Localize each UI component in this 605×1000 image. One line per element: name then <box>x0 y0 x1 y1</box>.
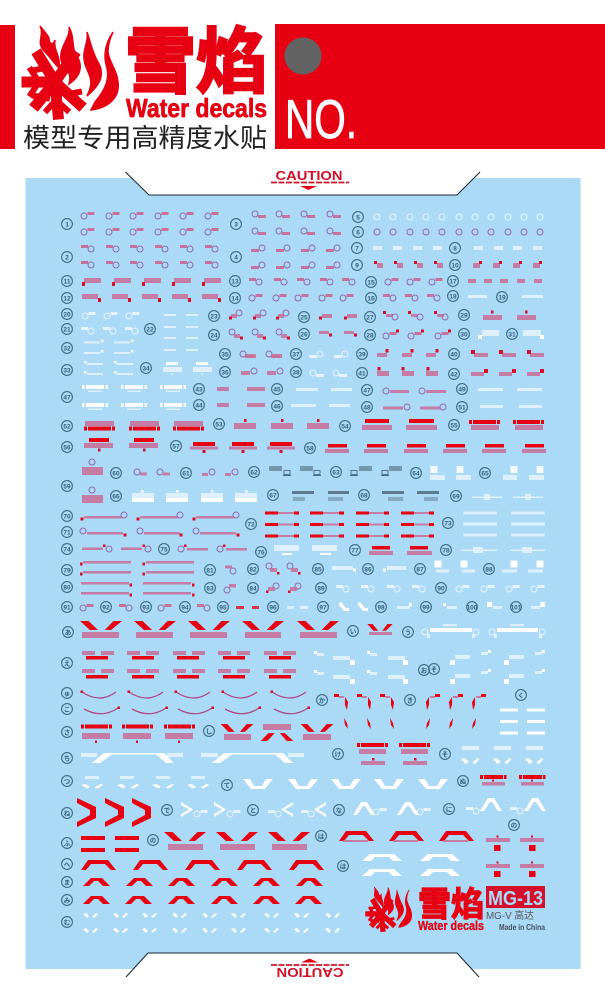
row 1-6: circles with labels: 1 <box>65 222 69 228</box>
row 2,4,7-10 <box>62 243 542 270</box>
row 20-31: 26 <box>300 332 308 338</box>
product code box: MG-13 <box>488 888 543 910</box>
row 43-51: 51 <box>458 404 466 412</box>
row ね: red chevrons and white marks: と <box>250 806 256 814</box>
row 20-31 <box>62 309 544 351</box>
row 79-90: 82 <box>249 566 257 574</box>
row え: blobs and red bars: そ <box>431 666 437 674</box>
row 91-101: 91 <box>63 604 71 612</box>
row 59-69: 65 <box>481 470 489 478</box>
row 32-42: 34 <box>142 366 150 372</box>
row 20-31: 20 <box>63 312 71 318</box>
row 59-69: 69 <box>452 494 460 500</box>
row 79-90: 80 <box>63 584 71 592</box>
row 70-78: 76 <box>257 550 265 556</box>
row 11-18: 18 <box>449 294 457 300</box>
row む: small white marks: む <box>64 918 71 926</box>
row 91-101: 95 <box>219 604 227 612</box>
row 52-55: 53 <box>215 422 223 428</box>
row 1-6: circles with labels <box>62 211 543 237</box>
row 32-42: 36 <box>221 370 229 376</box>
row 59-69: 63 <box>332 470 340 476</box>
row 79-90: 90 <box>437 586 445 592</box>
row ふ の は: red marks: は <box>318 832 325 840</box>
bottom notch with flipped caution mark <box>126 953 479 980</box>
row 32-42: 35 <box>221 352 229 358</box>
row 59-69: 62 <box>250 470 258 476</box>
row 11-18: 13 <box>231 278 239 286</box>
row 91-101: 99 <box>422 604 430 612</box>
row 20-31: 24 <box>210 332 218 340</box>
row 32-42: 42 <box>450 372 458 378</box>
row 91-101: 94 <box>181 604 189 612</box>
row 43-51: 47 <box>363 388 371 394</box>
row ふ の は: red marks: の <box>511 822 518 830</box>
row 70-78: 78 <box>442 548 450 554</box>
row 1-6: circles with labels: 3 <box>234 222 238 228</box>
row 79-90: 79 <box>63 568 71 574</box>
row 52-55: 55 <box>450 422 458 430</box>
row 11-18: 14 <box>231 296 239 302</box>
row 91-101: 96 <box>269 604 277 612</box>
row: smile curves <box>82 692 308 714</box>
row 70-78: 74 <box>63 546 71 554</box>
row 79-90 <box>62 560 544 596</box>
row 91-101: 93 <box>142 604 150 612</box>
row 59-69: 59 <box>63 484 71 490</box>
row 59-69 <box>62 459 544 503</box>
row 32-42: 32 <box>63 346 71 352</box>
row 32-42: 38 <box>292 370 300 376</box>
row 70-78: 71 <box>63 530 71 536</box>
row ち つ て ぬ: white hats <box>62 753 545 790</box>
panel: red number banner <box>275 24 605 150</box>
row 11-18: 16 <box>367 296 375 302</box>
row ね: red chevrons and white marks: で <box>164 808 171 814</box>
row さ し け そ: し <box>206 728 212 736</box>
row 43-51: 43 <box>195 386 203 394</box>
panel: red number banner: NO. <box>285 88 357 150</box>
row へ ま み: red hats: ま <box>64 878 70 886</box>
row 11-18: 12 <box>63 296 71 302</box>
row: kana badges and red spikes: こ <box>64 706 70 714</box>
kana rows: red V marks with labels: う <box>405 628 411 636</box>
row 32-42: 33 <box>63 368 71 374</box>
row 52-55: 52 <box>63 424 71 430</box>
row 59-69: 60 <box>112 470 120 478</box>
row 43-51: 49 <box>458 386 466 394</box>
row ち つ て ぬ: white hats: つ <box>64 778 71 786</box>
header: left red bar <box>0 25 15 149</box>
row 56-58: 57 <box>172 444 180 450</box>
row 20-31: 29 <box>460 312 468 320</box>
row: kana badges and red spikes: か <box>319 696 326 704</box>
row: kana badges and red spikes <box>62 688 545 734</box>
row へ ま み: red hats: み <box>64 896 71 904</box>
icon: flame snowflake logo <box>27 26 118 114</box>
row 32-42 <box>62 340 544 379</box>
row 11-18: 17 <box>449 278 457 286</box>
row 20-31: 21 <box>63 326 71 334</box>
row さ し け そ: さ <box>64 728 70 736</box>
row 20-31: 28 <box>366 332 374 340</box>
row 70-78: 72 <box>247 522 255 528</box>
row へ ま み: red hats <box>62 859 324 905</box>
row 32-42: 40 <box>450 352 458 358</box>
row ね: red chevrons and white marks: な <box>336 806 343 814</box>
row え: blobs and red bars <box>62 650 545 684</box>
panel: decal sheet background <box>26 178 580 969</box>
row 2,4,7-10: 8 <box>453 246 457 252</box>
row 59-69: 61 <box>182 470 190 478</box>
row さ し け そ: け <box>335 750 341 758</box>
row へ ま み: red hats: へ <box>64 860 71 868</box>
row: kana badges and red spikes: ゅ <box>64 690 70 698</box>
row 91-101: 97 <box>319 604 327 612</box>
row え: blobs and red bars: え <box>64 658 70 668</box>
row ふ の は: red marks <box>62 820 544 877</box>
row 2,4,7-10: 4 <box>234 254 238 262</box>
row 79-90: 83 <box>206 586 214 592</box>
row 70-78: 75 <box>160 546 168 554</box>
row ち つ て ぬ: white hats: ち <box>64 754 70 762</box>
bottom notch with flipped caution mark: CAUTION <box>276 965 344 980</box>
row 20-31: 25 <box>300 314 308 322</box>
row 70-78: 70 <box>63 514 71 520</box>
row 79-90: 89 <box>317 586 325 592</box>
row 43-51 <box>62 384 542 412</box>
row 91-101: 101 <box>511 604 522 612</box>
row 59-69: 66 <box>112 494 120 500</box>
row 2,4,7-10: 2 <box>65 254 69 262</box>
row 11-18: 11 <box>64 278 71 286</box>
row 1-6: circles with labels: 6 <box>356 230 360 236</box>
model name: MG-V 高达 <box>486 909 534 922</box>
row ち つ て ぬ: white hats: ぬ <box>460 778 467 786</box>
row ね: red chevrons and white marks: に <box>446 806 452 814</box>
row 91-101 <box>62 602 545 612</box>
made in china: Made in China <box>499 923 545 932</box>
row 70-78 <box>62 511 545 557</box>
icon: small flame snowflake logo <box>368 887 412 929</box>
row 2,4,7-10: 7 <box>355 246 359 252</box>
row ね: red chevrons and white marks: ね <box>64 810 71 818</box>
row 11-18: 15 <box>367 280 375 286</box>
row ふ の は: red marks: ふ <box>64 840 71 848</box>
row 1-6: circles with labels: 5 <box>356 214 360 222</box>
subtitle: 模型专用高精度水贴 <box>23 123 267 153</box>
row 20-31: 22 <box>146 326 154 334</box>
heading: brand name: 雪焰 <box>125 23 267 103</box>
row: kana badges and red spikes: き <box>407 696 413 704</box>
row 43-51: 47 <box>63 394 71 402</box>
row 32-42: 37 <box>292 352 300 358</box>
row 79-90: 85 <box>314 566 322 574</box>
row ね: red chevrons and white marks <box>62 798 546 827</box>
row 11-18: 19 <box>498 294 506 302</box>
row 43-51: 48 <box>363 404 371 412</box>
small brand name: 雪焰 <box>418 886 484 924</box>
row 91-101: 100 <box>467 604 478 612</box>
row さ し け そ <box>62 724 544 765</box>
row 79-90: 87 <box>416 566 424 574</box>
row 91-101: 98 <box>377 604 385 612</box>
row 2,4,7-10: 10 <box>451 262 459 270</box>
row 56-58 <box>62 438 546 453</box>
small Water decals: Water decals <box>418 919 484 933</box>
row 79-90: 84 <box>249 586 257 592</box>
row さ し け そ: そ <box>442 750 448 758</box>
row 56-58: 58 <box>306 446 314 452</box>
row 52-55 <box>62 419 544 431</box>
row 2,4,7-10: 9 <box>355 262 359 270</box>
kana rows: red V marks with labels: い <box>350 628 357 636</box>
row 79-90: 86 <box>364 566 372 574</box>
row 52-55: 54 <box>341 424 349 430</box>
row 59-69: 67 <box>269 492 277 500</box>
row 70-78: 77 <box>351 548 359 554</box>
row 43-51: 46 <box>273 404 281 410</box>
row 56-58: 56 <box>63 444 71 452</box>
row 70-78: 73 <box>444 520 452 528</box>
row 59-69: 68 <box>360 492 368 500</box>
row 11-18 <box>62 276 543 303</box>
row む: small white marks <box>62 913 340 933</box>
row 79-90: 81 <box>206 568 214 574</box>
row 20-31: 30 <box>460 332 468 338</box>
kana rows: red V marks with labels <box>63 621 545 638</box>
row ふ の は: red marks: の <box>150 836 157 844</box>
row 32-42: 39 <box>358 352 366 358</box>
top notch with caution mark: CAUTION <box>276 168 342 183</box>
heading: Water decals: Water decals <box>126 93 267 123</box>
row 59-69: 64 <box>412 470 420 478</box>
row 20-31: 31 <box>508 332 516 338</box>
kana rows: red V marks with labels: あ <box>65 628 71 636</box>
row 43-51: 45 <box>273 386 281 394</box>
row 91-101: 92 <box>102 604 110 612</box>
row ち つ て ぬ: white hats: て <box>224 782 230 790</box>
bottom logo block <box>368 886 545 933</box>
row 20-31: 27 <box>366 314 374 322</box>
row 32-42: 41 <box>358 370 366 378</box>
row ふ の は: red marks: ほ <box>340 862 347 870</box>
row 43-51: 44 <box>195 402 203 410</box>
top notch with caution mark <box>126 168 480 195</box>
row え: blobs and red bars: お <box>421 666 428 674</box>
decal rows <box>62 211 546 933</box>
row: kana badges and red spikes: く <box>518 692 524 700</box>
row 20-31: 23 <box>210 314 218 320</box>
row 79-90: 88 <box>485 566 493 574</box>
